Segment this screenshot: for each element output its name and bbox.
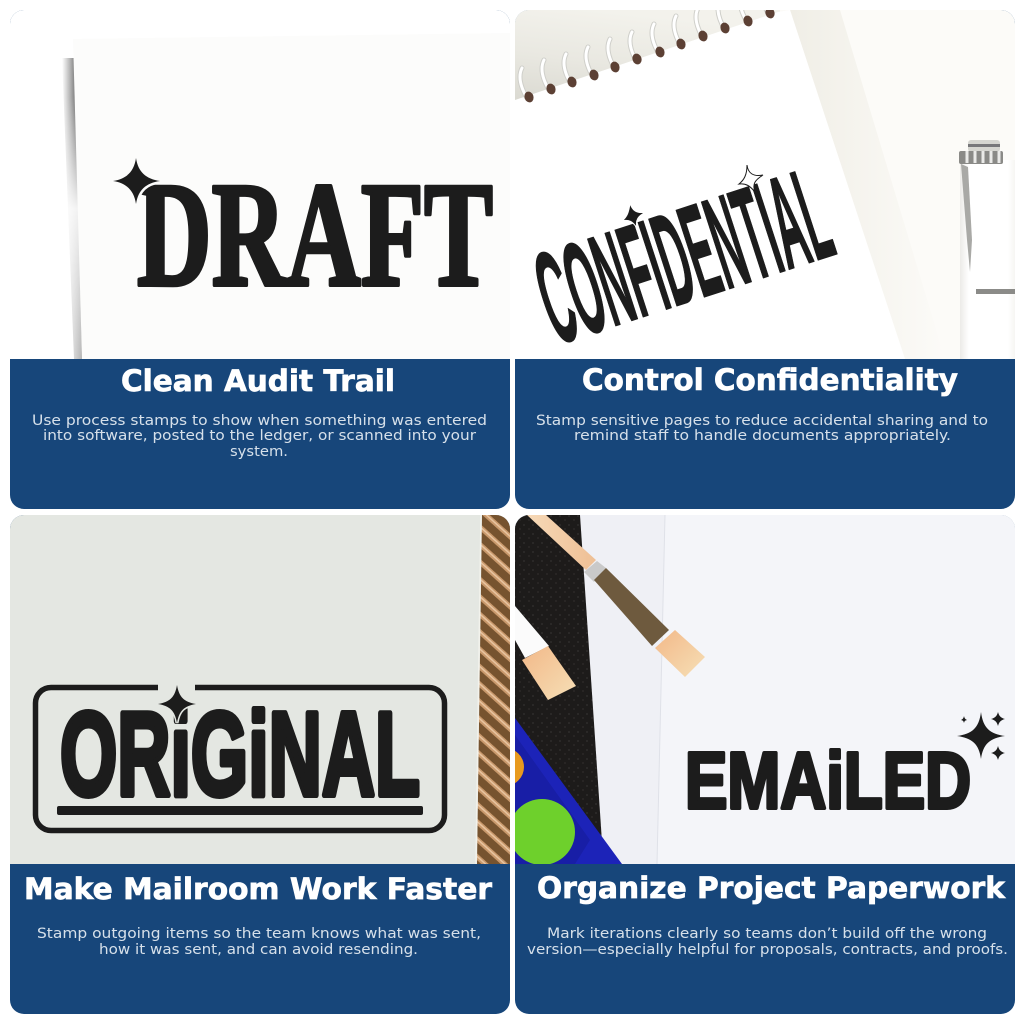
photo: textured paper with rope edge <box>10 515 510 864</box>
photo: spiral notebook and pen <box>515 0 1020 372</box>
body text: how it was sent, and can avoid resending. <box>99 942 418 958</box>
icon: sparkles <box>957 712 1005 760</box>
heading: Make Mailroom Work Faster <box>24 872 493 906</box>
heading: Control Confidentiality <box>582 363 958 397</box>
notebook spiral rings <box>520 0 769 98</box>
icon: outline sparkle <box>739 165 763 192</box>
body text: remind staff to handle documents appropriately. <box>574 428 951 444</box>
panel: clean audit trail <box>10 10 510 509</box>
main brush <box>527 515 705 677</box>
heading: Clean Audit Trail <box>121 364 395 398</box>
stamp word: DRAFT: DRAFT <box>137 152 493 318</box>
photo: paints and brushes on paper <box>486 515 1015 865</box>
panel: make mailroom work faster <box>10 515 510 1014</box>
body text: Use process stamps to show when something was entered <box>32 413 487 429</box>
body text <box>37 926 481 958</box>
body text <box>527 926 1008 958</box>
icon: filled sparkle <box>624 205 643 226</box>
body text <box>32 413 487 460</box>
panel: control confidentiality <box>515 0 1020 509</box>
heading: Organize Project Paperwork <box>537 871 1006 905</box>
icon: sparkle <box>113 158 160 204</box>
black foam sheet <box>515 515 602 842</box>
stamp: ORIGINAL <box>36 685 444 830</box>
paint palette <box>515 718 622 864</box>
icon: sparkle <box>158 685 196 723</box>
panel: organize project paperwork <box>486 515 1015 1014</box>
body text: system. <box>230 444 288 460</box>
body text: Mark iterations clearly so teams don’t build off the wrong <box>547 926 987 942</box>
stamp: ORIGINAL: ORiGiNAL <box>60 688 420 821</box>
body text <box>536 413 988 444</box>
body text: Stamp outgoing items so the team knows what was sent, <box>37 926 481 942</box>
body text: Stamp sensitive pages to reduce accidental sharing and to <box>536 413 988 429</box>
second brush <box>515 606 576 700</box>
body text: into software, posted to the ledger, or scanned into your <box>43 428 476 444</box>
pen <box>959 140 1015 359</box>
body text: version—especially helpful for proposals, contracts, and proofs. <box>527 942 1008 958</box>
rope edge <box>477 515 510 864</box>
photo: paper with DRAFT stamp <box>10 10 510 359</box>
